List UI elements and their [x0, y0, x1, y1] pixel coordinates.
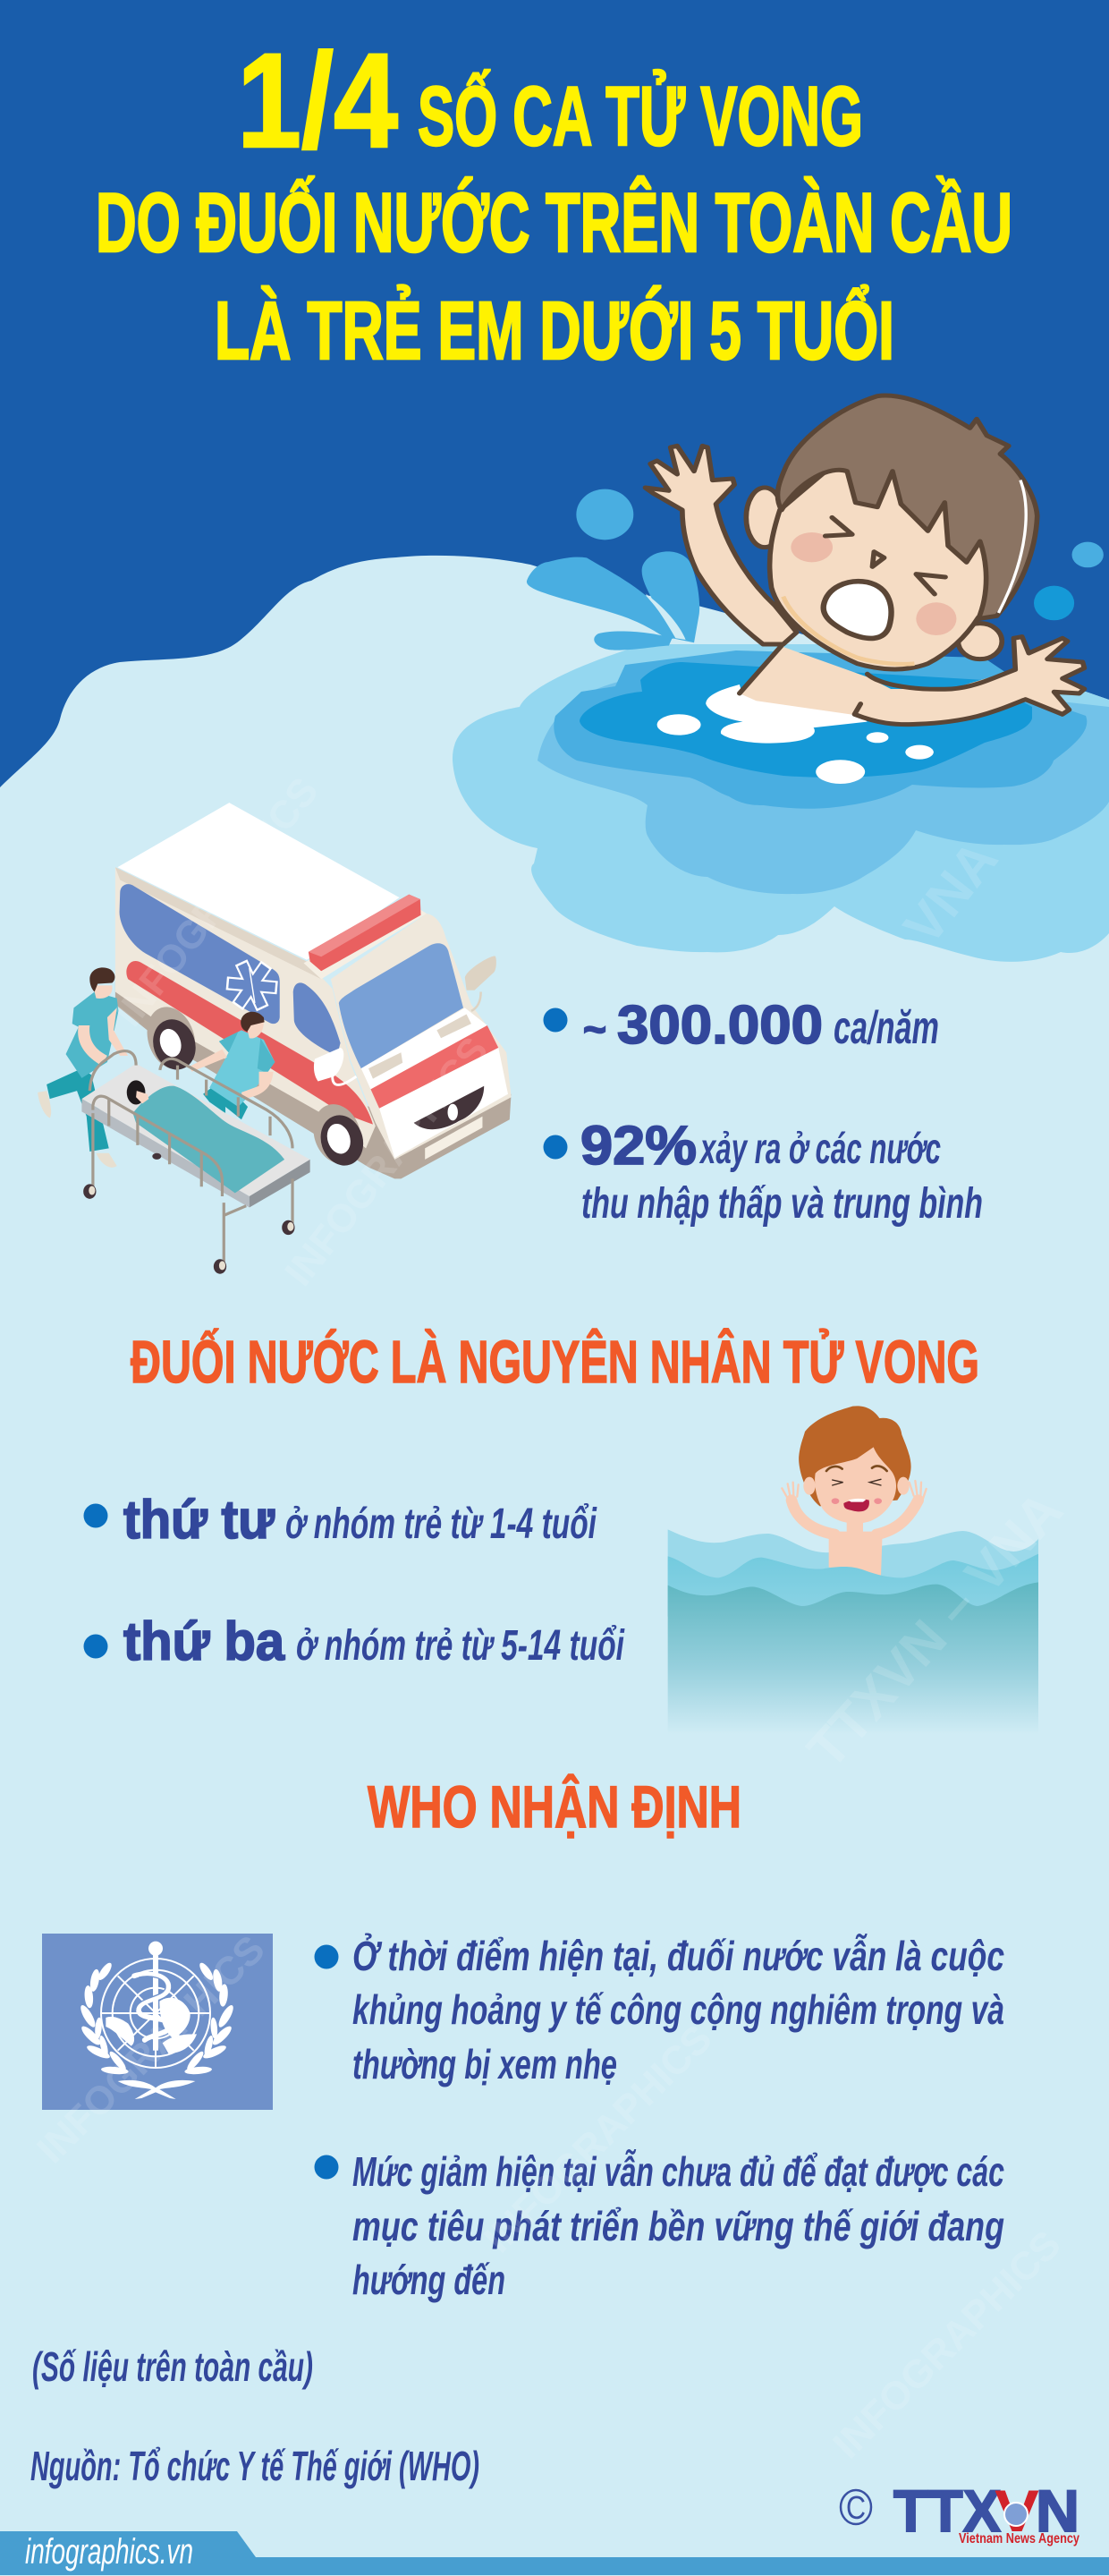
note: global data: (Số liệu trên toàn cầu)	[32, 2343, 313, 2390]
ambulance side body	[115, 867, 376, 1148]
ears	[746, 488, 783, 548]
laurel	[78, 1961, 236, 2075]
illustration: child in waves	[668, 1406, 1038, 1734]
unit: ca/năm	[834, 1002, 939, 1054]
bullet	[544, 1007, 567, 1033]
watermarks: INFOGRAPHICS	[106, 769, 327, 1034]
group 1-4: ở nhóm trẻ từ 1-4 tuổi	[285, 1501, 597, 1548]
nurse 2	[189, 1012, 275, 1119]
torso and right arm	[740, 637, 1084, 723]
nurse 1	[38, 967, 128, 1168]
splash drops	[527, 489, 1104, 650]
ambulance roof	[117, 803, 400, 960]
agency logo: N	[1036, 2478, 1079, 2544]
mouth	[824, 582, 891, 638]
rank third: thứ ba	[123, 1611, 285, 1671]
watermarks: INFOGRAPHICS	[29, 1927, 274, 2172]
WHO flag panel	[42, 1934, 273, 2110]
title line 1 number: 1/4	[237, 25, 398, 175]
knot	[118, 2080, 195, 2099]
white band	[361, 1007, 487, 1089]
title line 1 words: SỐ CA TỬ VONG	[418, 69, 863, 163]
icon: drowning boy with splash	[527, 395, 1104, 784]
logo globe	[1004, 2503, 1028, 2526]
hair highlight	[998, 480, 1026, 613]
continents	[159, 1998, 190, 2038]
title	[96, 25, 1012, 377]
ambulance front	[331, 914, 512, 1160]
heading: WHO assessment: WHO NHẬN ĐỊNH	[368, 1773, 741, 1840]
front wave fading down	[668, 1582, 1038, 1734]
statement 1 line 3: thường bị xem nhẹ	[352, 2041, 617, 2087]
foam	[657, 684, 934, 784]
number of deaths: 300.000	[617, 995, 823, 1055]
agency logo	[841, 2478, 1079, 2546]
staff	[153, 1949, 158, 2051]
bullet	[84, 1634, 107, 1659]
rank fourth: thứ tư	[123, 1490, 275, 1550]
cab side window	[293, 982, 341, 1056]
patient	[133, 1086, 284, 1193]
illustration: ambulance and medical staff	[38, 803, 512, 1274]
bullet	[315, 1945, 338, 1968]
stretcher with patient	[81, 1051, 310, 1274]
watermarks: VNA	[892, 829, 1009, 956]
percentage note line 1: xảy ra ở các nước	[698, 1126, 941, 1173]
casters	[83, 1153, 295, 1274]
side mirrors	[465, 956, 496, 990]
side red stripe	[126, 961, 373, 1125]
rails	[89, 1051, 292, 1265]
watermarks: INFOGRAPHICS	[825, 2223, 1070, 2467]
logo tagline: Vietnam News Agency	[959, 2531, 1079, 2546]
copyright mark: C	[846, 2489, 866, 2526]
tilde: ~	[583, 1006, 606, 1052]
bullet	[544, 1135, 567, 1160]
rank list	[84, 1490, 625, 1671]
side window panel	[120, 884, 280, 1024]
front red stripe	[370, 1025, 498, 1109]
face	[770, 450, 1005, 669]
middle wave	[668, 1554, 1038, 1617]
percentage: 92%	[580, 1115, 697, 1176]
eyes and nose	[825, 517, 945, 594]
logo letters: TTX	[893, 2478, 1001, 2544]
wheels	[140, 1000, 369, 1171]
watermarks: INFOGRAPHICS	[476, 2017, 721, 2261]
footer bar	[0, 2531, 1109, 2575]
serpent	[134, 1974, 170, 2040]
icon: WHO emblem	[78, 1942, 236, 2099]
source: Nguồn: Tổ chức Y tế Thế giới (WHO)	[30, 2443, 479, 2489]
water pool under drowning boy	[453, 644, 1109, 962]
bullet	[315, 2155, 338, 2180]
left arm and hand	[645, 446, 797, 644]
cheeks	[791, 532, 833, 562]
group 5-14: ở nhóm trẻ từ 5-14 tuổi	[296, 1622, 625, 1670]
footer site name: infographics.vn	[25, 2532, 193, 2572]
hair	[777, 395, 1037, 619]
stats block	[544, 995, 983, 1228]
statement 2 line 3: hướng đến	[352, 2257, 505, 2303]
back wave	[668, 1529, 1038, 1617]
watermarks: INFOGRAPHICS	[276, 1029, 497, 1294]
watermarks	[29, 769, 1074, 2467]
background: light water area	[0, 556, 1109, 2576]
light bar	[304, 903, 427, 979]
bullet	[84, 1503, 107, 1528]
agency logo: V	[995, 2478, 1039, 2544]
watermarks: TTXVN – VNA	[796, 1480, 1074, 1780]
windshield	[339, 943, 463, 1068]
grille	[414, 1086, 484, 1129]
WHO statements	[315, 1933, 1004, 2303]
ambulance rear skirt	[115, 979, 512, 1178]
crying child	[782, 1406, 927, 1577]
lower front	[379, 1048, 508, 1158]
star of life	[226, 959, 278, 1011]
